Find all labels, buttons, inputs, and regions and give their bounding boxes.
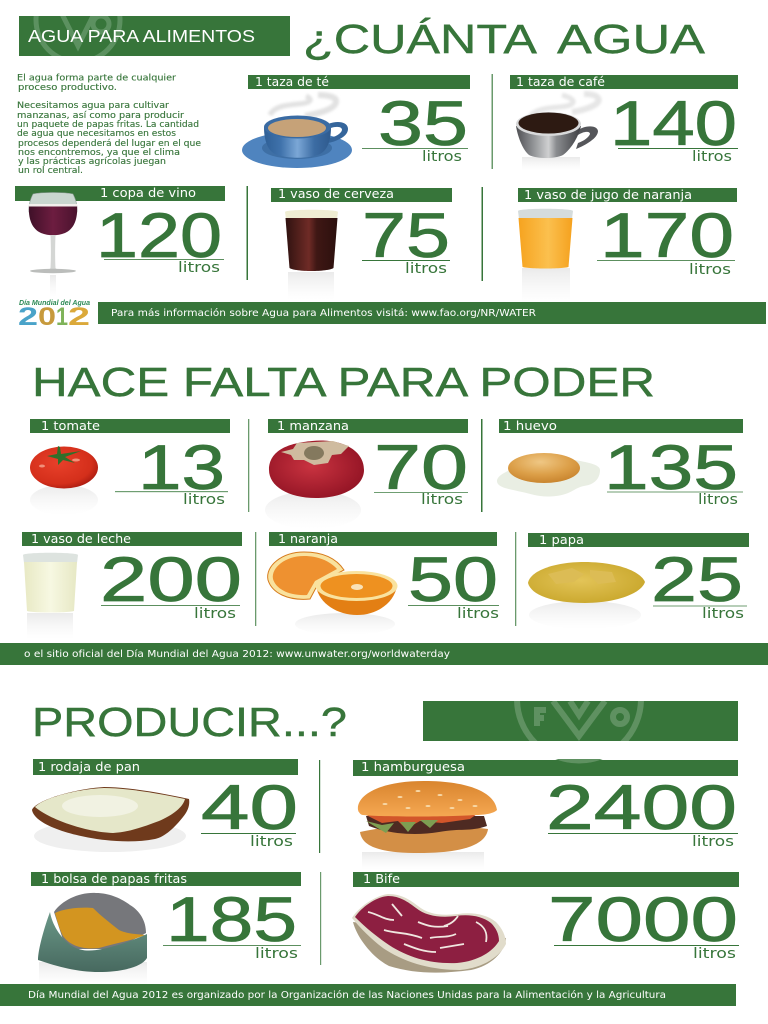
intro text block [17, 72, 201, 175]
icon: apple [265, 440, 364, 529]
panel: bolsa de papas fritas: 1 bolsa de papas fritas [41, 872, 187, 886]
title: cuánta agua [303, 16, 706, 62]
intro text block: proceso productivo. [18, 82, 117, 92]
panel: rodaja de pan [32, 759, 298, 852]
panel: bife: 1 Bife [363, 872, 400, 886]
icon: wine glass [29, 192, 77, 297]
panel: vaso de jugo de naranja: 1 vaso de jugo de naranja [524, 188, 692, 202]
icon: steak [352, 894, 506, 973]
panel: taza de café: 1 taza de café [516, 75, 605, 89]
logo: día mundial del agua 2012: 2 [18, 303, 38, 331]
panel: vaso de cerveza: 1 vaso de cerveza [278, 187, 394, 201]
title: cuánta agua: AGUA [557, 16, 706, 62]
panel: vaso de cerveza [271, 187, 452, 300]
footer bar: Día Mundial del Agua 2012 es organizado por la Organización de las Naciones Unidas para la Alimentación y la Agricultura [28, 989, 666, 1001]
logo: día mundial del agua 2012 [18, 300, 90, 331]
footer bar [0, 984, 736, 1006]
icon: hamburger [358, 781, 497, 870]
unit litros: litros [405, 261, 447, 277]
info bar: fao link: Para más información sobre Agua para Alimentos visitá: www.fao.org/NR/WATER [111, 307, 536, 319]
info bar: unwater link [0, 643, 768, 665]
number 7000: 7000 [548, 885, 738, 955]
intro text block: Necesitamos agua para cultivar [17, 100, 170, 110]
number 185: 185 [166, 885, 297, 955]
unit litros: litros [250, 834, 293, 850]
unit litros: litros [194, 606, 236, 622]
logo: día mundial del agua 2012: 2 [68, 303, 90, 331]
icon: bag of chips [38, 893, 147, 986]
panel: tomate [30, 419, 230, 515]
number 2400: 2400 [546, 773, 737, 843]
panel: tomate: 1 tomate [41, 419, 100, 433]
intro text block: y las prácticas agrícolas juegan [18, 156, 166, 166]
number 25: 25 [651, 545, 743, 615]
number 135: 135 [604, 433, 738, 503]
panel: manzana [265, 419, 468, 529]
number 50: 50 [408, 545, 498, 615]
intro text block: un rol central. [18, 165, 83, 175]
panel: taza de té [242, 75, 470, 168]
number 70: 70 [374, 433, 468, 503]
intro text block: nos encontremos, ya que el clima [18, 147, 180, 157]
unit litros: litros [422, 149, 462, 165]
panel: huevo: 1 huevo [503, 419, 557, 433]
fao logo bar [423, 701, 738, 741]
number 140: 140 [610, 89, 737, 159]
panel: bife [352, 872, 739, 973]
panel: naranja [268, 532, 499, 635]
panel: bolsa de papas fritas [31, 872, 301, 986]
logo: día mundial del agua 2012: Día Mundial del Agua [19, 300, 90, 307]
number 200: 200 [100, 545, 242, 615]
unit litros: litros [692, 149, 732, 165]
intro text block: de agua que necesitamos en estos [17, 128, 176, 138]
intro text block: El agua forma parte de cualquier [17, 72, 177, 82]
unit litros: litros [698, 492, 738, 508]
intro text block: un paquete de papas fritas. La cantidad [17, 119, 199, 129]
logo: día mundial del agua 2012: 1 [56, 303, 68, 331]
unit litros: litros [457, 606, 499, 622]
number 35: 35 [378, 89, 468, 159]
number 13: 13 [138, 433, 225, 503]
panel: taza de café [510, 75, 738, 171]
panel: vaso de jugo de naranja [518, 188, 737, 304]
unit litros: litros [421, 492, 463, 508]
unit litros: litros [183, 492, 225, 508]
icon: glass of milk [23, 553, 78, 639]
panel: vaso de leche: 1 vaso de leche [31, 532, 131, 546]
unit litros: litros [693, 946, 736, 962]
number 120: 120 [96, 201, 222, 271]
number 170: 170 [600, 201, 734, 271]
unit litros: litros [255, 946, 298, 962]
number 75: 75 [362, 201, 450, 271]
unit litros: litros [692, 834, 734, 850]
panel: papa: 1 papa [539, 533, 584, 547]
unit litros: litros [178, 260, 220, 276]
info bar: unwater link: o el sitio oficial del Día Mundial del Agua 2012: www.unwater.org/worldwaterday [24, 648, 450, 660]
unit litros: litros [689, 262, 731, 278]
panel: copa de vino: 1 copa de vino [100, 186, 196, 200]
icon: coffee cup [516, 94, 599, 171]
title: cuánta agua: ¿CUÁNTA [303, 16, 538, 62]
logo: día mundial del agua 2012: 0 [38, 303, 56, 331]
header bar: agua para alimentos [19, 16, 290, 56]
icon: potato [528, 562, 645, 629]
panel: rodaja de pan: 1 rodaja de pan [38, 760, 140, 774]
icon: orange halves [268, 552, 398, 635]
panel: huevo [497, 419, 743, 508]
panel: papa [528, 533, 749, 629]
unit litros: litros [702, 606, 744, 622]
panel: vaso de leche [22, 532, 242, 639]
intro text block: manzanas, así como para producir [17, 110, 185, 120]
number 40: 40 [201, 773, 298, 843]
panel: hamburguesa: 1 hamburguesa [361, 760, 465, 774]
header bar: agua para alimentos: AGUA PARA ALIMENTOS [28, 26, 255, 46]
icon: beer glass [285, 210, 338, 300]
icon: orange juice glass [518, 209, 573, 304]
panel: taza de té: 1 taza de té [255, 75, 329, 89]
icon: fried egg [497, 453, 600, 497]
intro text block: procesos dependerá del lugar en el que [18, 138, 201, 148]
icon: tea cup [242, 95, 352, 168]
icon: tomato [30, 446, 98, 515]
heading: producir: PRODUCIR...? [32, 699, 347, 745]
panel: naranja: 1 naranja [278, 532, 338, 546]
panel: copa de vino [15, 186, 225, 297]
panel: hamburguesa [353, 759, 738, 860]
info bar: fao link [98, 302, 766, 324]
panel: manzana: 1 manzana [277, 419, 349, 433]
heading: hace falta para poder: HACE FALTA PARA PODER [32, 359, 655, 405]
icon: slice of bread [32, 787, 189, 852]
